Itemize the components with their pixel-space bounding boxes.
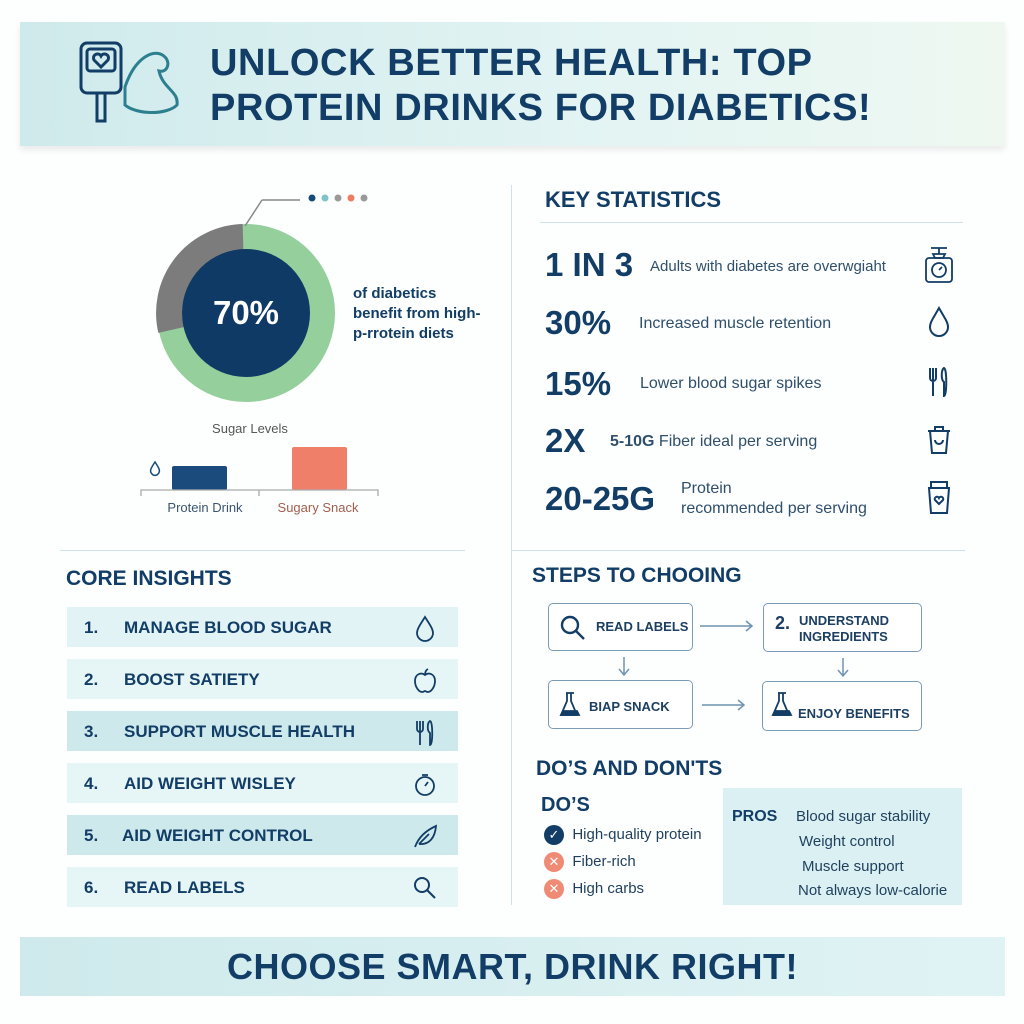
stat 2: 30% (545, 304, 611, 341)
pros panel: Muscle support (802, 858, 904, 875)
row 4 (67, 763, 458, 803)
key statistics list: Increased muscle retention (639, 315, 831, 332)
row 3 (67, 711, 458, 751)
donut caption: p-rrotein diets (353, 325, 454, 342)
row 1 (67, 607, 458, 647)
step: understand ingredients: UNDERSTAND (799, 613, 889, 628)
bar chart: sugar levels (140, 421, 379, 515)
pros panel: Blood sugar stability (796, 808, 930, 825)
row 3: 3. (84, 722, 98, 741)
step: understand ingredients: INGREDIENTS (799, 629, 888, 644)
item: fiber-rich: Fiber-rich (572, 853, 636, 870)
bar chart: sugar levels: Protein Drink (167, 500, 243, 515)
item: high carbs (544, 879, 644, 899)
row 6: READ LABELS (124, 878, 245, 897)
bar chart: sugar levels: Sugary Snack (278, 500, 359, 515)
item: fiber-rich (544, 852, 636, 872)
heading: core insights: CORE INSIGHTS (66, 567, 232, 590)
pros panel: PROS (732, 808, 777, 825)
item: high-quality protein (544, 825, 702, 845)
item: high-quality protein: High-quality protein (572, 826, 702, 843)
key statistics list (545, 246, 953, 517)
stat 4: 2X (545, 422, 585, 459)
title: PROTEIN DRINKS FOR DIABETICS! (210, 87, 871, 129)
footer banner: CHOOSE SMART, DRINK RIGHT! (227, 946, 798, 987)
do's list: DO’S (541, 794, 590, 816)
row 1: MANAGE BLOOD SUGAR (124, 618, 332, 637)
step: understand ingredients: 2. (775, 613, 790, 633)
step: enjoy benefits: ENJOY BENEFITS (798, 706, 910, 721)
footer banner (20, 937, 1005, 996)
row 5 (67, 815, 458, 855)
title: UNLOCK BETTER HEALTH: TOP (210, 42, 813, 84)
row 2 (67, 659, 458, 699)
key statistics list: 5-10G Fiber ideal per serving (610, 433, 817, 450)
stat 5: 20-25G (545, 480, 655, 517)
key statistics list: Protein (681, 480, 732, 497)
step: understand ingredients (763, 603, 922, 652)
item: high carbs: ✕ (549, 881, 559, 896)
title (210, 42, 871, 129)
donut chart: 70% (213, 294, 279, 331)
item: fiber-rich: ✕ (549, 854, 559, 869)
donut caption: benefit from high- (353, 305, 480, 322)
donut chart (156, 194, 368, 402)
flowchart: steps (548, 603, 922, 731)
stat 1: 1 IN 3 (545, 246, 633, 283)
item: high carbs: High carbs (572, 880, 644, 897)
row 5: AID WEIGHT CONTROL (122, 826, 313, 845)
pros panel (723, 788, 962, 905)
step: snack (548, 680, 693, 729)
bar chart: sugar levels: Sugar Levels (212, 421, 288, 436)
key statistics list: Adults with diabetes are overwgiaht (650, 258, 886, 275)
step: enjoy benefits (762, 681, 922, 731)
step: read labels: READ LABELS (596, 619, 688, 634)
row 2: 2. (84, 670, 98, 689)
pros panel: Not always low-calorie (798, 882, 947, 899)
key statistics list: recommended per serving (681, 500, 867, 517)
row 6: 6. (84, 878, 98, 897)
arrow (618, 657, 630, 676)
pros panel: Weight control (799, 833, 895, 850)
arrow (838, 658, 848, 677)
row 1: 1. (84, 618, 98, 637)
arrow (702, 700, 745, 710)
row 4: 4. (84, 774, 98, 793)
donut caption (353, 285, 480, 342)
row 6 (67, 867, 458, 907)
row 2: BOOST SATIETY (124, 670, 260, 689)
row 4: AID WEIGHT WISLEY (124, 774, 296, 793)
step: snack: BIAP SNACK (589, 699, 670, 714)
step: read labels (548, 603, 693, 651)
heading: do's and don'ts: DO’S AND DON'TS (536, 757, 722, 780)
heading: key statistics: KEY STATISTICS (545, 187, 721, 212)
row 5: 5. (84, 826, 98, 845)
item: high-quality protein: ✓ (549, 827, 559, 842)
stat 3: 15% (545, 365, 611, 402)
icon: glucose meter and muscle (80, 42, 179, 122)
key statistics list: Lower blood sugar spikes (640, 375, 821, 392)
donut caption: of diabetics (353, 285, 436, 302)
row 3: SUPPORT MUSCLE HEALTH (124, 722, 355, 741)
arrow (700, 620, 753, 632)
header banner (20, 22, 1005, 146)
do's list (541, 794, 702, 899)
core insights list (67, 607, 458, 907)
heading: steps to choosing: STEPS TO CHOOING (532, 564, 742, 587)
